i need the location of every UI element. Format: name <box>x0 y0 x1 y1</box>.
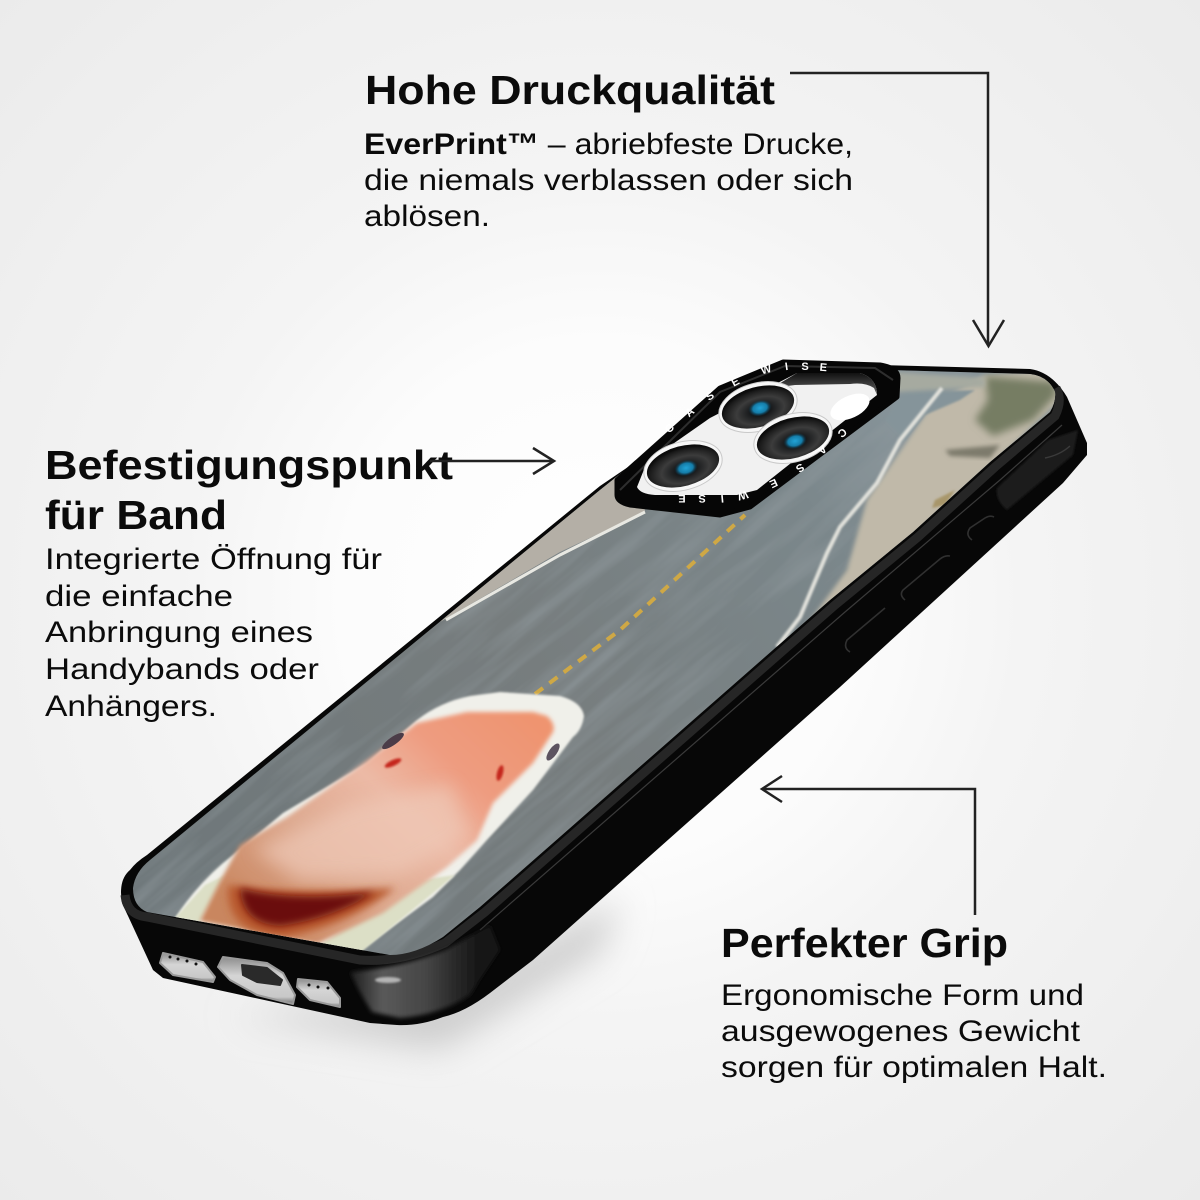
heading: print quality: Hohe Druckqualität <box>365 67 775 113</box>
left road line <box>446 512 645 620</box>
brand ring lettering top: E <box>730 375 742 389</box>
lens top <box>713 373 803 441</box>
brand ring lettering top: A <box>683 406 697 420</box>
goose mouth <box>240 888 375 926</box>
nostril left <box>384 756 402 770</box>
yellow centre dashes <box>535 515 745 694</box>
brand ring lettering top: I <box>784 361 789 373</box>
heading: strap attachment <box>45 442 453 538</box>
nostril right <box>495 764 505 782</box>
green bushes <box>975 376 1056 436</box>
text: print quality description: ablösen. <box>364 200 490 233</box>
brand ring lettering bottom <box>678 425 849 504</box>
goose eye left <box>382 732 404 750</box>
text: strap attachment description: Anhängers. <box>45 690 217 723</box>
ring highlight <box>620 366 893 490</box>
camera window <box>637 373 877 495</box>
brand ring lettering bottom: C <box>835 425 849 439</box>
distant road <box>910 389 974 432</box>
road texture <box>134 370 1054 955</box>
shaded sand band <box>945 445 1000 458</box>
rim groove <box>480 425 1062 930</box>
USB port <box>218 957 295 1004</box>
case body <box>121 362 1087 1025</box>
arrow: grip <box>762 776 975 915</box>
left sand verge <box>440 472 645 622</box>
brand ring lettering bottom: E <box>678 492 686 504</box>
brand ring lettering top: E <box>819 362 827 374</box>
sheen highlight <box>375 977 401 983</box>
horizon <box>893 372 985 392</box>
text: grip description: ausgewogenes Gewicht <box>721 1015 1081 1048</box>
brand ring lettering bottom: W <box>736 488 749 502</box>
text: grip description: Ergonomische Form und <box>721 979 1084 1012</box>
text: print quality description: EverPrint™ – abriebfeste Drucke, <box>364 128 853 161</box>
heading: grip: Perfekter Grip <box>721 920 1008 966</box>
goose feathers <box>175 692 584 953</box>
brand ring lettering bottom: S <box>793 460 806 474</box>
text: print quality description <box>364 128 853 233</box>
text: strap attachment description: die einfache <box>45 580 233 613</box>
lower edge sheen <box>350 925 500 1018</box>
side buttons <box>846 516 994 652</box>
text: strap attachment description: Handybands oder <box>45 653 319 686</box>
mouth halo <box>228 885 395 937</box>
asphalt <box>110 360 1070 960</box>
speaker right <box>297 979 340 1007</box>
brand ring lettering bottom: A <box>815 442 829 456</box>
brand ring lettering top: W <box>760 363 773 377</box>
brand ring lettering top <box>663 361 827 436</box>
text: strap attachment description: Integrierte Öffnung für <box>45 543 382 576</box>
heading: strap attachment: Befestigungspunkt <box>45 442 453 488</box>
right sand verge <box>810 373 1056 618</box>
phone shadow <box>230 900 620 1048</box>
strap slot <box>997 430 1078 510</box>
text: strap attachment description <box>45 543 382 723</box>
sand stain <box>932 490 955 508</box>
brand ring lettering bottom: S <box>698 492 706 504</box>
brand ring lettering top: S <box>801 361 809 373</box>
lens right <box>748 404 838 472</box>
brand ring lettering top: S <box>704 390 717 404</box>
window rim shadow <box>772 373 877 395</box>
brand ring lettering top: C <box>663 422 677 436</box>
bill highlight <box>255 785 470 880</box>
text: print quality description: die niemals verblassen oder sich <box>364 164 853 197</box>
brand ring lettering bottom: I <box>720 492 724 504</box>
text: grip description: sorgen für optimalen Halt. <box>721 1051 1107 1084</box>
camera ring <box>617 362 898 515</box>
goose bill <box>200 712 554 944</box>
speaker left <box>160 953 215 982</box>
flash <box>826 388 874 426</box>
phone case <box>120 360 1087 1026</box>
goose eye right <box>546 744 560 760</box>
slot glint <box>1045 446 1070 458</box>
brand ring lettering bottom: E <box>767 476 779 490</box>
right road line <box>777 388 942 647</box>
text: grip description <box>721 979 1107 1084</box>
bezel rim <box>125 388 1059 960</box>
lens left <box>638 432 728 500</box>
heading: strap attachment: für Band <box>45 492 227 538</box>
text: strap attachment description: Anbringung eines <box>45 616 313 649</box>
feather tint bottom <box>175 875 455 953</box>
camera module <box>617 361 898 515</box>
back print: road photo <box>133 370 1056 955</box>
arrow: strap attachment <box>430 448 554 474</box>
arrow: print quality <box>790 73 1004 346</box>
